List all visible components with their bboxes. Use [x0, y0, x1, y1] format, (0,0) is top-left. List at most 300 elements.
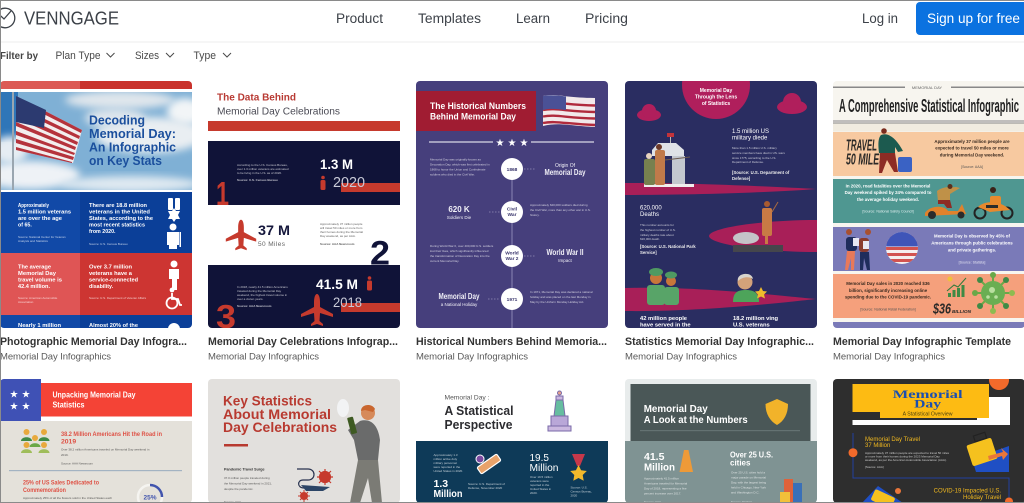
divider with stars: ★: [508, 138, 517, 149]
navy stats panel: military personnel: [434, 461, 457, 465]
stat: 38.2 million: 2019: [61, 438, 76, 446]
icon: buildings: [780, 479, 802, 503]
filter: type: [194, 50, 231, 62]
stat: memorial day travel: Approximately 37 million people are expected to travel 50 miles: [865, 451, 950, 455]
stat row 2: 2: [370, 234, 390, 272]
navy stats panel: 2020: [570, 494, 578, 498]
template card: a statistical perspective: [416, 379, 608, 503]
timeline descriptions: May by the Uniform Monday Holiday Act.: [530, 300, 584, 304]
band: road fatalities: the average holiday weekend.: [857, 197, 919, 202]
stat: 18.2 million: 18.2 million ving: [733, 316, 779, 322]
timeline descriptions: lost their lives, which significantly influenced: [430, 249, 489, 253]
stat: 25 percent: Commemoration: [23, 487, 66, 494]
dark title panel: Memorial Day: [644, 403, 708, 415]
band: road fatalities: Day weekend spiked by 24% compared to: [845, 190, 932, 195]
stat: 1.5 million: Defense]: [732, 176, 751, 181]
icon: person: [367, 276, 372, 290]
card artwork: [0, 81, 205, 335]
card headline: Memorial Day Celebrations: [217, 106, 340, 118]
grey stats panel: held in Chicago, New York: [731, 486, 767, 490]
band: observances: [833, 227, 1024, 271]
template card: key statistics: [208, 379, 400, 503]
stat row 3: weekend, the highest travel volume in: [237, 293, 288, 297]
band: travel: [833, 128, 1024, 176]
divider with stars: ★: [520, 138, 529, 149]
timeline labels: Memorial Day: [438, 292, 480, 301]
stat row 1: over 1.3 million veterans are estimated: [237, 167, 289, 171]
red stats panel: travel volume is: [18, 278, 62, 284]
card headline: [89, 112, 176, 168]
venngage logo: [0, 8, 15, 28]
band: travel: 50 MILES: [846, 152, 885, 168]
card headline: Day Celebrations: [223, 419, 337, 435]
grey stats panel: Over 25 U.S.: [730, 450, 773, 460]
card category: Memorial Day Infographics: [833, 352, 945, 362]
top navigation bar: [0, 0, 1024, 43]
card category: Memorial Day Infographics: [208, 352, 319, 362]
stat row 2: 37 M: [258, 222, 290, 238]
navy stats panel: reported in the: [530, 483, 550, 487]
stat row 2: their homes during the Memorial: [320, 230, 363, 234]
band: travel: Approximately 37 million people are: [934, 139, 1010, 144]
blue stats panel: from 2020.: [89, 229, 116, 235]
stat row 3: Source: AAA Newsroom: [237, 304, 272, 308]
icon: traffic cone: [680, 450, 693, 472]
timeline descriptions: In 1971, Memorial Day was declared a national: [530, 290, 593, 294]
stat: 620,000 deaths: the highest number of U.S.: [640, 228, 676, 232]
timeline descriptions: soldiers who died in the Civil War.: [430, 172, 475, 176]
illustration: veteran with star: [733, 274, 767, 302]
stat: memorial day travel: Memorial Day Travel: [865, 437, 920, 443]
pink sweeps: [625, 183, 817, 311]
card artwork: [833, 81, 1024, 328]
grey stats panel: percent increase over 2017.: [644, 492, 681, 496]
stat: 620,000 deaths: Service]: [640, 250, 657, 255]
card title: Statistics Memorial Day Infographic...: [625, 336, 814, 348]
red stats panel: [0, 253, 192, 315]
nav: log in: Log in: [862, 11, 898, 26]
timeline labels: Origin Of: [555, 163, 576, 169]
blue stats panel: veterans in the United: [89, 210, 150, 216]
divider with stars: ★: [496, 138, 505, 149]
title banner: [416, 91, 536, 131]
illustration: scooter: [925, 184, 966, 219]
progress ring: 25%: [138, 485, 162, 503]
yellow title shape: A Statistical Overview: [903, 411, 953, 417]
progress ring: 25%: 25%: [143, 494, 157, 502]
pandemic travel text: 37.0 million people traveled during: [224, 476, 270, 480]
yellow title shape: [852, 384, 989, 418]
stat: 42 million: [640, 316, 691, 328]
card headline: Memorial Day :: [444, 394, 490, 402]
navy stats panel: Approximately 1.3: [434, 453, 458, 457]
bottom blue panel: [1, 315, 192, 328]
illustration: traveller: [878, 128, 912, 173]
template card: a look at the numbers: [625, 379, 817, 503]
card title: Memorial Day Infographic Template: [833, 336, 1011, 348]
grey stats panel: [625, 441, 817, 503]
card headline: Perspective: [444, 418, 513, 432]
template card: photographic memorial day: [0, 81, 205, 362]
timeline descriptions: 1868 to honor the Union and Confederate: [430, 168, 486, 172]
illustration: flag globe: [886, 232, 918, 264]
title banner: The Historical Numbers: [430, 101, 526, 111]
icon: group of people: [21, 429, 50, 453]
orange dot: [848, 448, 858, 457]
blue star square: ★: [22, 390, 31, 400]
grey stats panel: and Washington D.C.: [731, 490, 760, 494]
title circle: Memorial Day: [700, 88, 732, 94]
stat: memorial day travel: [Source: AAA]: [865, 465, 884, 469]
stat: 1.5 million: [732, 129, 790, 181]
stat row 3: 41.5 M: [316, 276, 358, 292]
stat: 38.2 million: 2019.: [61, 453, 69, 457]
card headline: The Data Behind: [217, 92, 296, 104]
dark title panel: [630, 384, 810, 441]
card headline: An Infographic: [89, 140, 176, 154]
stat row 3: In 2018, nearly 41.5 million Americans: [237, 285, 288, 289]
illustration: monument with soldiers: [644, 133, 694, 187]
red title band: Statistics: [52, 400, 85, 410]
band: travel: [Source: AAA]: [961, 165, 983, 169]
timeline descriptions: [430, 158, 593, 304]
card artwork: [625, 81, 817, 328]
stat: 620,000 deaths: 620,000: [640, 206, 662, 212]
band: sales: billion, significantly increasing online: [849, 288, 928, 293]
band: sales: Memorial Day sales in 2020 reached $36: [846, 281, 930, 286]
stat: 25 percent: 25% of US Sales Dedicated to: [23, 480, 99, 486]
illustration: green soldiers: [647, 268, 679, 305]
blue star square: ★: [10, 390, 19, 400]
stat row 1: 1.3 M: [320, 156, 353, 172]
navy stats panel: million active duty: [434, 457, 458, 461]
stat: 1.5 million: 1.5 million US: [732, 129, 769, 135]
timeline descriptions: the Civil War, more than any other war in U.S.: [530, 208, 591, 212]
icon: virus large: [317, 469, 333, 485]
timeline: Civil: [507, 206, 517, 212]
photo of flag and sky: [0, 91, 205, 192]
stat row 1: to be living in the U.S. as of 2020.: [237, 171, 282, 175]
icon: virus small: [298, 490, 310, 502]
pandemic travel text: the Memorial Day weekend in 2021,: [224, 482, 272, 486]
navy stats panel: Defense, November 2020: [468, 486, 503, 490]
grey stats panel: Americans traveled for Memorial: [644, 482, 688, 486]
navy stats panel: Source: U.S.: [570, 486, 588, 490]
card category: Memorial Day Infographics: [0, 352, 111, 362]
stat: covid: Holiday Travel: [963, 495, 1001, 501]
nav: templates: Templates: [418, 11, 481, 26]
red stats panel: service-connected: [89, 278, 138, 284]
card title: Historical Numbers Behind Memoria...: [416, 336, 607, 348]
blue stats panel: are over the age: [18, 216, 62, 222]
grey stats panel: Over 25 U.S. cities hold a: [731, 470, 765, 474]
stat: 620,000 deaths: 620,000 death.: [640, 237, 660, 241]
timeline labels: 620 K: [448, 205, 470, 214]
filter: plan type: Plan Type: [56, 50, 100, 62]
red stats panel: 42.4 million.: [18, 284, 51, 290]
blue stats panel: States, according to the: [89, 216, 153, 222]
card headline: on Key Stats: [89, 153, 162, 168]
stat: 1.5 million: military diede: [732, 136, 768, 142]
icon: person: [320, 176, 326, 190]
band: sales: BILLION: [952, 309, 972, 315]
stat: 1.5 million: [Source: U.S. Department of: [732, 170, 790, 175]
timeline: War 2: [506, 256, 519, 262]
timeline descriptions: the transformation of Decoration Day into the: [430, 254, 490, 258]
dark title panel: A Look at the Numbers: [644, 414, 748, 426]
stat row 2: Day weekend, as per AAA.: [320, 234, 356, 238]
card header: MEMORIAL DAY: [912, 85, 942, 90]
red stats panel: The average: [18, 264, 51, 270]
blue stats panel: Analysis and Statistics: [18, 239, 48, 243]
sign up button: [916, 2, 1024, 35]
template card: statistical overview: [833, 370, 1024, 503]
card artwork: [416, 81, 608, 329]
illustration: soldier with champagne: [337, 399, 382, 503]
icon: virus: [972, 272, 1015, 314]
timeline descriptions: holiday and was placed on the last Monday in: [530, 295, 591, 299]
icon: wheelchair: [166, 288, 182, 308]
blue star square: ★: [22, 402, 31, 412]
card artwork: [208, 81, 400, 335]
card category: Memorial Day Infographics: [416, 352, 528, 362]
timeline labels: Memorial Day: [544, 168, 586, 177]
card header: [833, 85, 1024, 124]
timeline descriptions: history.: [530, 213, 540, 217]
timeline descriptions: During World War II, over 400,000 U.S. soldiers: [430, 244, 494, 248]
nav: pricing: Pricing: [585, 11, 628, 26]
timeline: World: [505, 250, 519, 256]
red stats panel: Source: American Automobile: [18, 296, 58, 300]
icon: plane and road: [297, 469, 330, 491]
card headline: Key Statistics: [223, 392, 312, 408]
template card: memorial day celebrations: [208, 81, 400, 362]
grey stats panel: Day of 2018, representing a five: [644, 486, 687, 490]
navy stats panel: veterans were: [530, 479, 549, 483]
timeline labels: Impact: [558, 258, 572, 263]
stat: 620,000 deaths: [Source: U.S. National Park: [640, 244, 696, 249]
red stats panel: Memorial Day: [18, 271, 56, 277]
illustration: soldier statue: [733, 201, 783, 252]
icon: monument: [548, 391, 571, 431]
template card: statistics through the lens: [625, 51, 817, 362]
stat row 3: [208, 265, 400, 335]
white block: [852, 397, 1010, 425]
grey stats panel: major parade on Memorial: [731, 476, 766, 480]
grey stats panel: 41.5: [644, 451, 665, 463]
stat row 2: [226, 220, 389, 264]
icon: suitcase: [966, 432, 1009, 472]
american flag: [16, 96, 82, 163]
title circle: Through the Lens: [695, 94, 737, 100]
icon: growth chart: [947, 276, 966, 297]
stat: 18.2 million: [733, 316, 779, 328]
connector line: [853, 433, 1009, 503]
brand name: VENNGAGE: [24, 8, 119, 28]
band: observances: Americans through public celebrations: [931, 240, 1013, 246]
blue stats panel: Source: National Center for Veteran: [18, 235, 66, 239]
icon: blue case: [862, 486, 903, 503]
template card: unpacking statistics: [0, 379, 192, 503]
blue stats panel: There are 18.8 million: [89, 203, 147, 209]
navy stats panel: Million: [434, 488, 462, 500]
timeline: [488, 158, 536, 329]
stat row 1: According to the U.S. Census Bureau,: [237, 163, 288, 167]
band: road fatalities: In 2020, road fatalities over the Memorial: [846, 184, 930, 188]
nav: product: Product: [336, 11, 383, 26]
stat row 1: Source: U.S. Census Bureau: [237, 178, 278, 182]
card headline: [444, 394, 514, 432]
icon: airplane: [226, 220, 256, 250]
grey stats panel: Million: [644, 462, 675, 474]
stat: memorial day travel: weekend, as per the American Automobile Association (AAA).: [865, 458, 947, 462]
card headline: Decoding: [89, 112, 145, 128]
pandemic travel text: [224, 468, 272, 503]
timeline: 1868: [507, 167, 518, 173]
card title: Photographic Memorial Day Infogra...: [0, 336, 187, 348]
title banner: Behind Memorial Day: [430, 112, 516, 122]
stat row 2: 50 Miles: [258, 241, 286, 248]
stat: covid: COVID-19 Impacted U.S.: [934, 488, 1001, 494]
timeline: War: [508, 212, 517, 218]
stat: 38.2 million: Over 38.2 million Americans traveled on Memorial Day weekend in: [61, 448, 150, 452]
stat: 620,000 deaths: [640, 206, 696, 255]
filter: sizes: [135, 50, 174, 62]
navy stats panel: Million: [530, 463, 558, 474]
blue stats panel: [0, 192, 192, 253]
blue star square: [0, 379, 41, 421]
card category: Memorial Day Infographics: [625, 352, 737, 362]
navy stats panel: 1.3: [434, 478, 448, 490]
bottom blue panel: Nearly 1 million: [18, 323, 61, 329]
stat row 3: 3: [216, 298, 236, 335]
band: road fatalities: [833, 179, 1024, 223]
filter: sizes: Sizes: [135, 50, 159, 62]
stat: 38.2 million: [61, 431, 162, 466]
stat: 25 percent: Approximately 25% of all the flowers sold in the United States each: [23, 496, 112, 500]
stat: 42 million: have served in the: [640, 322, 691, 328]
stat: memorial day travel: or more from their homes during the 2023 Memorial Day: [865, 454, 940, 458]
filter: type: Type: [194, 50, 216, 62]
stat row 3: traveled during the Memorial Day: [237, 289, 282, 293]
stat row 1: [208, 141, 400, 212]
stat: 1.5 million: Department of Defense.: [732, 160, 764, 164]
orange dot lower: [1005, 498, 1013, 503]
timeline descriptions: Decoration Day, which was first celebrated in: [430, 162, 490, 166]
timeline labels: Soldiers Die: [447, 215, 472, 220]
blue stats panel: Source: U.S. Census Bureau: [89, 242, 128, 246]
band: travel: expected to travel 50 miles or more: [935, 146, 1009, 150]
timeline labels: [438, 163, 586, 307]
icon: orange circle: [989, 370, 1009, 390]
yellow title shape: Day: [914, 396, 941, 410]
stat row 3: 2018: [333, 294, 362, 310]
illustration: motorcycle: [974, 187, 1012, 218]
red title band: [41, 383, 192, 416]
band: sales: spending due to the COVID-19 pandemic.: [845, 294, 931, 300]
card headline: Memorial Day:: [89, 126, 176, 141]
navy stats panel: were reported in the: [434, 465, 461, 469]
title circle: of Statistics: [702, 101, 730, 107]
icon: shield: [766, 399, 788, 425]
band: sales: [833, 272, 1024, 318]
card title: Memorial Day Celebrations Infograp...: [208, 336, 398, 348]
icon: clouds: [637, 93, 807, 121]
stat: covid: [934, 488, 1001, 501]
navy stats panel: 2020.: [530, 491, 538, 495]
template card: comprehensive statistical: [833, 81, 1024, 362]
card headline: A Statistical: [444, 404, 514, 418]
filter by label: Filter by: [0, 50, 38, 62]
navy stats panel: United States in: [530, 487, 552, 491]
stat: 1.5 million: More than 1.5 million U.S. military: [732, 146, 777, 150]
timeline labels: World War II: [546, 248, 584, 257]
stat: 1.5 million: service members have died in US. wars: [732, 151, 785, 155]
navy stats panel: 19.5: [530, 453, 549, 464]
stat: 38.2 million: Source: AAA Newsroom: [61, 462, 94, 466]
stat: 38.2 million: 38.2 Million Americans Hit the Road in: [61, 431, 162, 438]
timeline descriptions: current Memorial Day.: [430, 259, 459, 263]
icon: soldier: [167, 224, 181, 249]
stat row 2: Source: AAA Newsroom: [320, 242, 355, 246]
stat row 2: Approximately 37 million people: [320, 222, 363, 226]
red stats panel: veterans have a: [89, 271, 132, 277]
band: sales: $36: [932, 300, 951, 318]
pandemic travel text: Pandemic Travel Surge: [224, 468, 265, 472]
band: sales: [Source: National Retail Federation]: [860, 308, 916, 312]
red stats panel: Source: U.S. Department of Veteran Affairs: [89, 296, 147, 300]
band: observances: Memorial Day is observed by 45% of: [934, 234, 1010, 238]
blue stats panel: most recent statistics: [89, 222, 145, 228]
blue star square: ★: [10, 402, 19, 412]
icon: medal: [168, 198, 180, 222]
red title band: Unpacking Memorial Day: [52, 390, 136, 400]
card headline: [217, 92, 340, 118]
stat: 620,000 deaths: Deaths: [640, 212, 659, 218]
timeline descriptions: Memorial Day was originally known as: [430, 158, 481, 162]
navy stats panel: [416, 441, 608, 503]
title circle: [682, 81, 750, 119]
navy stats panel: Over 19.5 million: [530, 475, 553, 479]
navy stats panel: Source: U.S. Department of: [468, 482, 505, 486]
icon: flag: [543, 95, 595, 127]
stat: memorial day travel: [865, 437, 950, 469]
icon: crossed pencil: [476, 454, 501, 474]
yellow title shape: Memorial: [893, 387, 964, 401]
stat row 2: will travel 50 miles or more from: [320, 226, 363, 230]
card headline: About Memorial: [223, 406, 331, 422]
template card: historical numbers: [416, 81, 608, 362]
navy stats panel: United States in 2020.: [434, 469, 463, 473]
stat row 1: 2020: [333, 175, 365, 191]
timeline descriptions: Approximately 620,000 soldiers died during: [530, 203, 588, 207]
nav: learn: Learn: [516, 11, 550, 26]
icon: airplane: [301, 294, 333, 326]
illustration: two people: [845, 229, 871, 270]
navy stats panel: Census Bureau,: [570, 490, 592, 494]
stat: 42 million: 42 million people: [640, 316, 688, 322]
bottom blue panel: Almost 20% of the: [89, 323, 138, 329]
blue stats panel: Approximately: [18, 203, 49, 209]
stat row 1: 1: [216, 175, 229, 212]
grey stats panel: Day, with the largest being: [731, 480, 766, 484]
blue stats panel: 1.5 million veterans: [18, 210, 71, 216]
blue stats panel: of 65.: [18, 222, 32, 228]
stat: 18.2 million: U.S. veterans: [733, 322, 770, 328]
divider with stars: [429, 138, 594, 146]
stat: memorial day travel: 37 Million: [865, 443, 890, 449]
timeline: 1971: [507, 297, 518, 303]
